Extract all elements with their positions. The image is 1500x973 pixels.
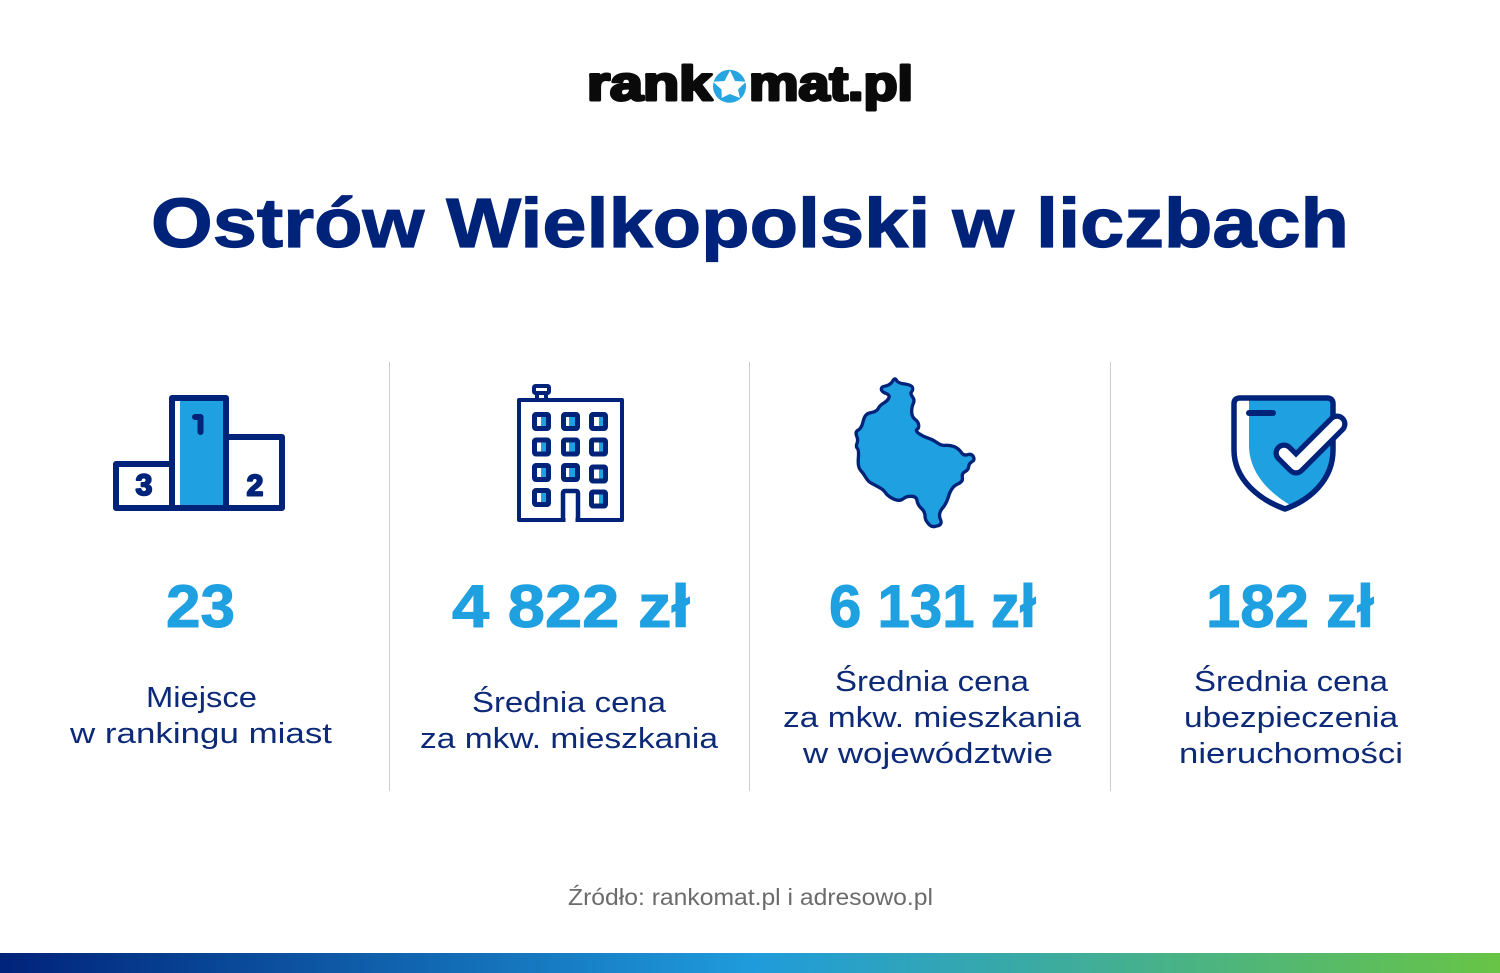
- panel: ranking position: [69, 398, 332, 750]
- icon: apartment building: [519, 386, 622, 522]
- logo: rankomat.pl: rank: [587, 58, 712, 111]
- label: voivodeship price: za mkw. mieszkania: [783, 702, 1082, 734]
- panel: apartment price in voivodeship: [783, 379, 1082, 770]
- icon: podium: 2: [247, 470, 263, 502]
- icon: shield with check: [1234, 398, 1337, 509]
- logo: rankomat.pl: mat.pl: [749, 58, 913, 111]
- value: voivodeship price: 6 131 zł: [829, 573, 1036, 640]
- label: city price: za mkw. mieszkania: [420, 723, 719, 755]
- label: insurance price: [1179, 664, 1403, 770]
- label: rank: [69, 682, 332, 750]
- label: city price: [420, 685, 719, 755]
- label: insurance price: nieruchomości: [1179, 738, 1403, 770]
- label: insurance price: ubezpieczenia: [1184, 702, 1399, 734]
- label: voivodeship price: [783, 664, 1082, 770]
- label: rank: Miejsce: [146, 682, 257, 714]
- label: insurance price: Średnia cena: [1194, 664, 1389, 698]
- icon: voivodeship map: [856, 379, 974, 527]
- title: Ostrów Wielkopolski w liczbach: [151, 184, 1349, 262]
- logo: rankomat.pl: [587, 58, 913, 111]
- value: rank: 23: [166, 573, 235, 640]
- source note: Źródło: rankomat.pl i adresowo.pl: [568, 884, 933, 910]
- icon: podium: [116, 398, 282, 508]
- label: voivodeship price: w województwie: [802, 738, 1053, 770]
- panel: apartment price in city: [420, 386, 719, 755]
- label: rank: w rankingu miast: [69, 718, 332, 750]
- panel: property insurance: [1179, 398, 1403, 770]
- label: city price: Średnia cena: [472, 685, 667, 719]
- gradient footer bar: [0, 953, 1500, 973]
- icon: podium: 3: [136, 469, 152, 502]
- value: city price: 4 822 zł: [452, 573, 690, 640]
- label: voivodeship price: Średnia cena: [835, 664, 1030, 698]
- value: insurance price: 182 zł: [1206, 573, 1374, 640]
